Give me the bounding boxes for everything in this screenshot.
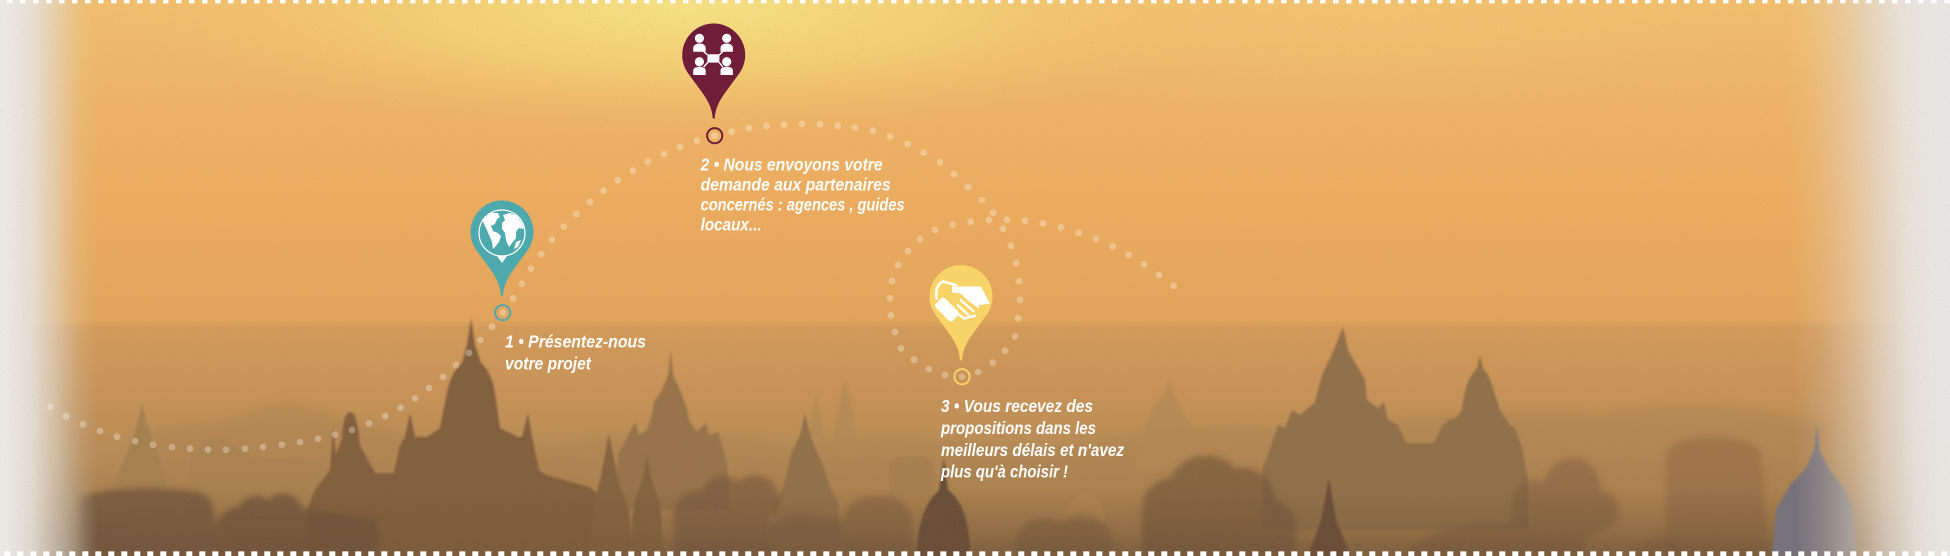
location ring maroon [707,128,722,143]
foreground trees [80,438,1768,556]
pointed stupa and block [770,413,933,540]
text: step 3: 3 • Vous recevez des [941,396,1093,416]
paper fade: left edge [0,0,100,556]
paper fade: right edge [1770,0,1950,556]
text: step 3: meilleurs délais et n'avez [941,440,1124,460]
icon: globe [479,210,525,263]
far-left hazy temple [116,403,322,500]
dark foreground spires [917,457,1351,556]
location ring yellow [954,369,970,384]
text: step 3: propositions dans les [940,418,1096,438]
icon: handshake [934,282,990,323]
text: step 2: locaux... [701,215,762,235]
step 3: handshake pin [930,265,1129,482]
small dark spires beside main temple [588,433,664,556]
faint far temples [808,377,1204,523]
step 2: partners pin [682,24,909,235]
step 1: globe pin [470,201,651,374]
right edge grey temple [1772,424,1856,556]
text: step 2: concernés : agences , guides [701,195,905,215]
text: step 3: plus qu'à choisir ! [940,462,1068,482]
pin marker maroon [682,24,745,119]
pin marker teal [470,201,534,296]
pin marker yellow [930,265,992,360]
main temple silhouette [305,318,600,556]
temple silhouette near centre-left [614,350,730,510]
right temple silhouettes [1262,327,1528,530]
text: step 2: 2 • Nous envoyons votre [700,155,883,175]
dotted route path [47,121,1177,453]
text: step 1: 1 • Présentez-nous [505,332,646,352]
dashed border top [7,0,1950,3]
text: step 1: votre projet [505,354,592,374]
ground shadow [0,490,1950,556]
location ring teal [495,305,510,320]
grey tint on lower side fades [54,479,89,556]
distant misty tree line [130,405,1830,540]
icon: connected people [693,34,733,75]
text: step 2: demande aux partenaires [701,175,891,195]
dashed border bottom [4,551,1950,556]
